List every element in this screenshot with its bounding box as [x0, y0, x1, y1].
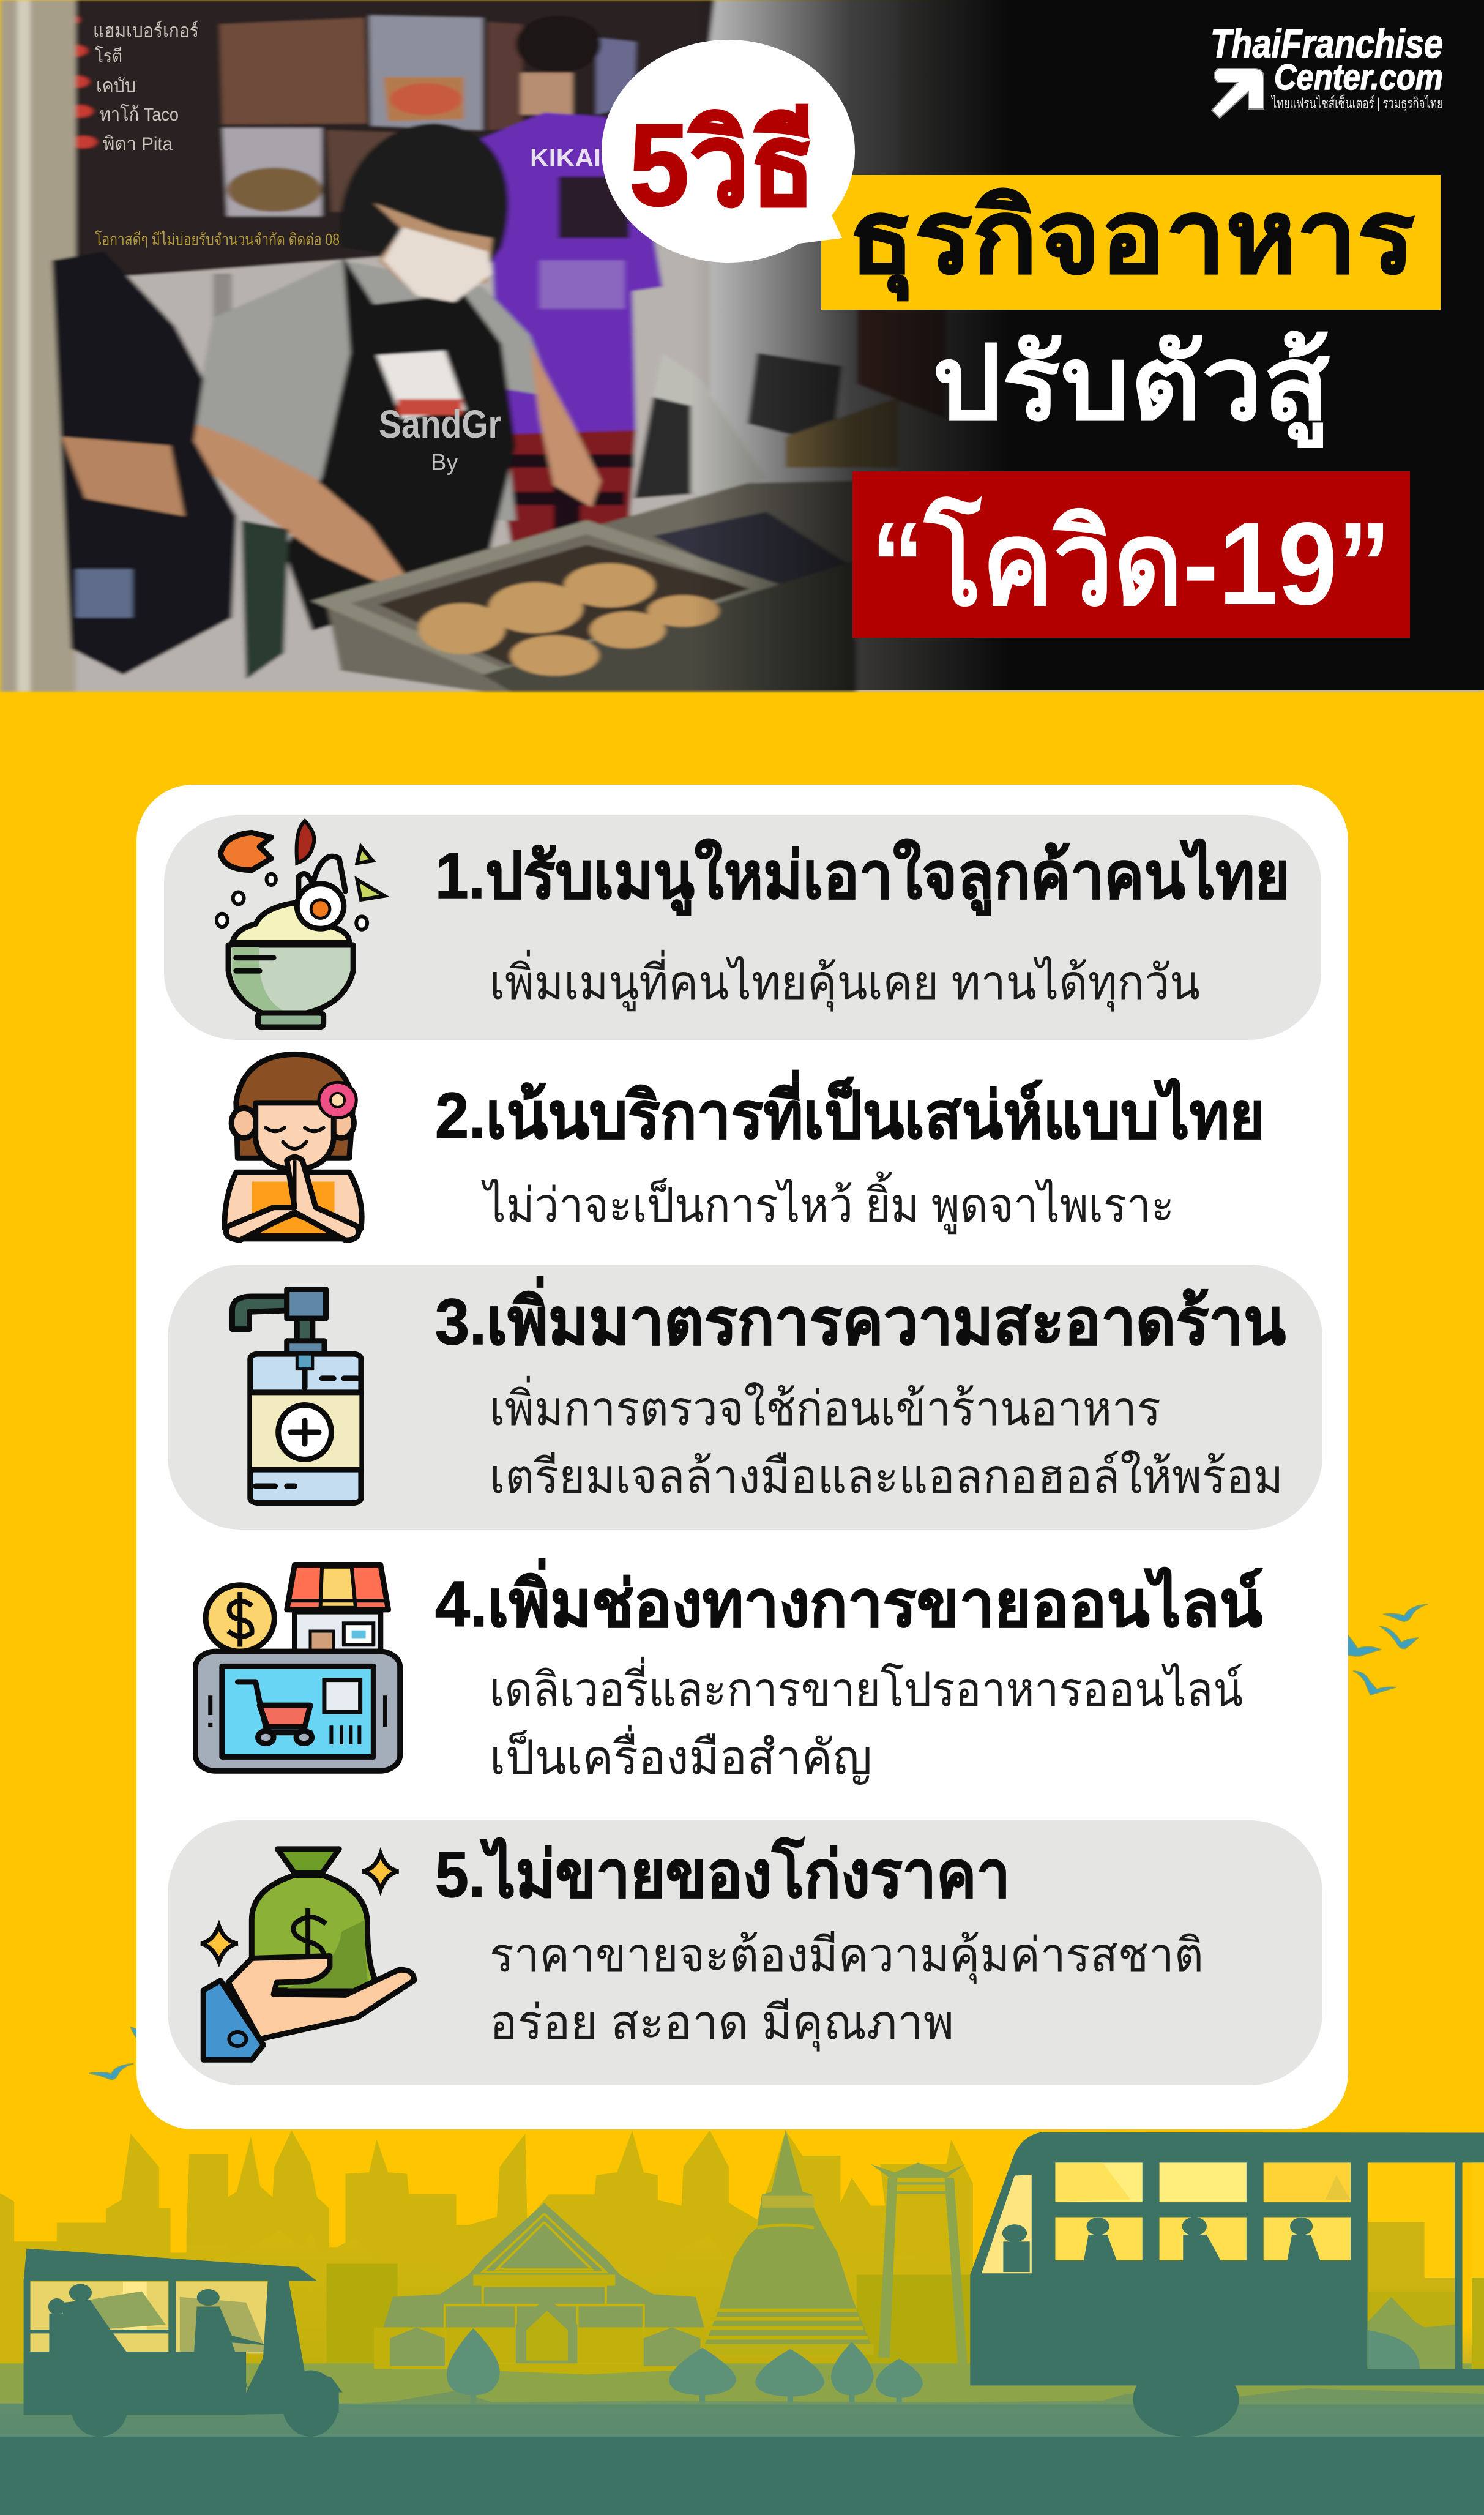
panel: tip 1 — [164, 815, 1321, 1040]
bus — [970, 2132, 1484, 2437]
logo arrow — [1212, 69, 1264, 118]
trees — [447, 2328, 923, 2405]
city silhouette far — [0, 2130, 973, 2363]
main white card — [136, 785, 1348, 2129]
banner menu text: โรตี — [95, 45, 122, 67]
page background — [0, 690, 1484, 2515]
tip 1 heading: 1.ปรับเมนูใหม่เอาใจลูกค้าคนไทย — [435, 839, 1290, 916]
tuk-tuk — [24, 2249, 343, 2437]
tip 3 heading: 3.เพิ่มมาตรการความสะอาดร้าน — [435, 1276, 1286, 1358]
dark right area — [1009, 0, 1484, 690]
speech bubble: 5 ways: 5วิธี — [629, 100, 816, 230]
tip 3 body — [490, 1376, 1283, 1503]
ground band — [0, 2404, 1484, 2437]
tip 5 body: ราคาขายจะต้องมีความคุ้มค่ารสชาติ — [490, 1928, 1204, 1984]
bottom scene: Bangkok skyline — [0, 2130, 1484, 2515]
dark fade overlay — [692, 0, 1010, 690]
giant swing — [871, 2162, 968, 2363]
tip 3 body: เตรียมเจลล้างมือและแอลกอฮอล์ให้พร้อม — [490, 1449, 1283, 1503]
tip 1 body: เพิ่มเมนูที่คนไทยคุ้นเคย ทานได้ทุกวัน — [490, 950, 1200, 1012]
city silhouette near — [187, 2230, 973, 2369]
banner menu text: แฮมเบอร์เกอร์ — [93, 20, 199, 41]
banner menu text: เคบับ — [96, 76, 136, 96]
road — [0, 2437, 1484, 2515]
bird behind card edge — [1336, 1622, 1381, 1656]
panel: tip 3 — [168, 1265, 1322, 1530]
logo name: ThaiFranchise — [1210, 21, 1443, 66]
shirt print: KIKAI — [530, 143, 601, 172]
tip 5 heading: 5.ไม่ขายของโก่งราคา — [435, 1837, 1010, 1911]
tip 1 background — [164, 815, 1321, 1040]
tip 2 body: ไม่ว่าจะเป็นการไหว้ ยิ้ม พูดจาไพเราะ — [481, 1171, 1174, 1234]
panel: tip 2 — [225, 1054, 1265, 1240]
tip 4 heading: 4.เพิ่มช่องทางการขายออนไลน์ — [435, 1558, 1262, 1640]
banner menu text: ทาโก้ Taco — [100, 103, 179, 125]
sky gradient — [0, 2247, 1484, 2404]
stupa — [705, 2130, 874, 2355]
tip 5 background — [168, 1820, 1322, 2085]
grass — [341, 2388, 1484, 2405]
panel: tip 5 — [168, 1820, 1322, 2085]
header photo: food stall — [0, 0, 1484, 692]
tip 5 body — [490, 1928, 1204, 2052]
tip 4 body: เดลิเวอรี่และการขายโปรอาหารออนไลน์ — [490, 1657, 1243, 1716]
ground olive — [0, 2363, 1484, 2405]
banner menu text — [93, 20, 199, 154]
apron logo by: By — [431, 450, 458, 476]
title line 3: red box: “โควิด-19” — [871, 495, 1391, 629]
title highlight: yellow box: ธุรกิจอาหาร — [849, 179, 1415, 301]
panel: tip 4 — [195, 1558, 1262, 1785]
icon: hand holding money bag — [201, 1849, 414, 2060]
icon: woman greeting with wai — [225, 1054, 362, 1240]
icon: rice bowl — [217, 821, 384, 1027]
scenery seen through bus rear opening — [1368, 2162, 1484, 2369]
banner menu text: พิตา Pita — [103, 134, 173, 154]
icon: hand sanitizer bottle — [232, 1290, 361, 1503]
tip 2 heading: 2.เน้นบริการที่เป็นเสน่ห์แบบไทย — [435, 1070, 1265, 1152]
birds: right — [1353, 1604, 1428, 1695]
title line 2: ปรับตัวสู้ — [932, 326, 1330, 448]
tip 4 body: เป็นเครื่องมือสำคัญ — [490, 1725, 872, 1785]
apron logo: SandGr — [379, 402, 501, 446]
speech bubble: 5 ways — [602, 40, 855, 263]
logo: ThaiFranchise Center.com — [1210, 21, 1443, 118]
bird: left — [89, 2027, 137, 2079]
tip 3 body: เพิ่มการตรวจใช้ก่อนเข้าร้านอาหาร — [490, 1376, 1161, 1435]
logo domain: Center.com — [1274, 58, 1443, 97]
tip 3 background — [168, 1265, 1322, 1530]
tip 4 body — [490, 1657, 1243, 1785]
banner promo line: โอกาสดีๆ มีไม่บ่อยรับจำนวนจำกัด ติดต่อ 08 — [95, 230, 340, 249]
icon: online shop tablet — [195, 1565, 400, 1771]
temple — [374, 2203, 705, 2374]
tip 5 body: อร่อย สะอาด มีคุณภาพ — [490, 1995, 954, 2052]
